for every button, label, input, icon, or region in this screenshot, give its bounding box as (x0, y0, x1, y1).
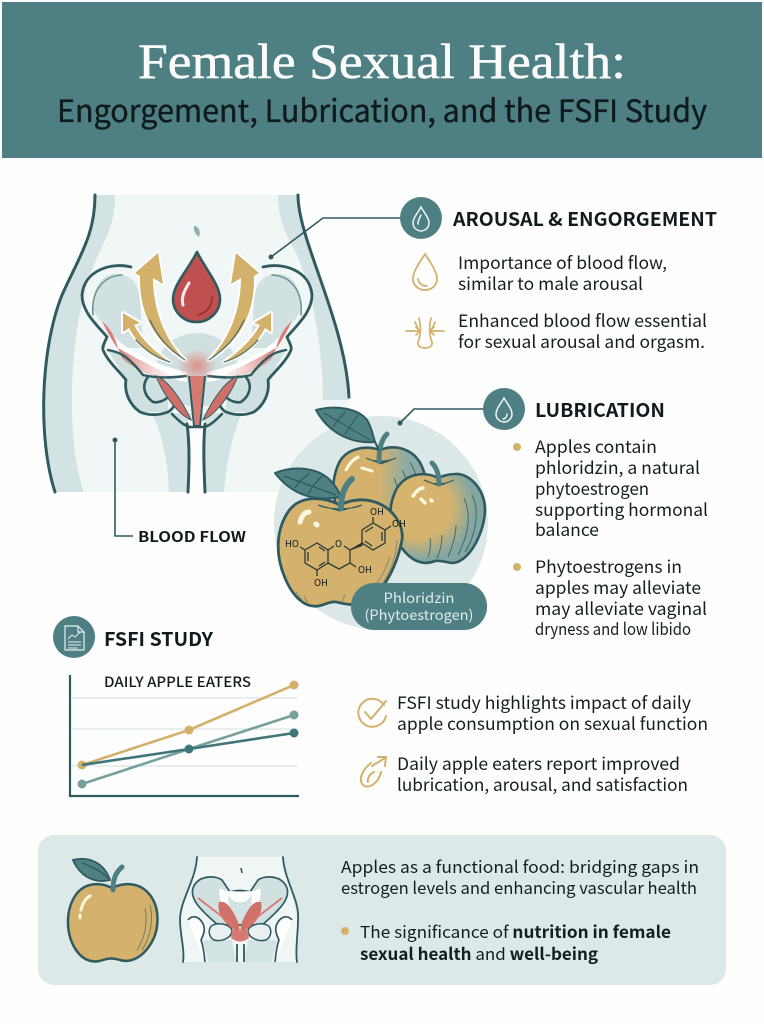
back leaf (316, 408, 379, 450)
phloridzin molecule (285, 504, 406, 589)
phloridzin label pill: (Phytoestrogen) (364, 605, 474, 625)
central muscle (177, 349, 217, 427)
FSFI text: improved outcomes: Daily apple eaters report improved (397, 750, 680, 775)
front leaf (275, 469, 341, 499)
summary bullet: significance of nutrition: The significance of nutrition in female (360, 919, 671, 943)
bullet: apples contain phloridzin: phloridzin, a natural (535, 454, 700, 479)
icon: gold drop (413, 254, 437, 290)
FSFI text: study highlights: apple consumption on sexual function (397, 710, 708, 735)
heading: arousal and engorgement: AROUSAL & ENGORGEMENT (452, 205, 717, 232)
arousal text: enhanced blood flow: Enhanced blood flow essential (458, 307, 707, 332)
icon: pelvis diagram (180, 857, 298, 962)
phloridzin molecule: HO (285, 536, 299, 550)
blood drop (173, 252, 220, 322)
line chart: daily apple eaters (70, 672, 299, 796)
bullet: apples contain phloridzin: balance (535, 516, 599, 541)
bullet: phytoestrogens in apples: may alleviate vaginal (535, 595, 707, 620)
title: Female Sexual Health: (138, 33, 626, 89)
subtitle: Engorgement, Lubrication, and the FSFI Study (57, 86, 707, 131)
front apple (278, 479, 402, 606)
series: dark teal (82, 728, 298, 765)
blood flow callout: BLOOD FLOW (138, 526, 246, 547)
arousal text: blood flow importance: similar to male arousal (458, 270, 643, 295)
phloridzin molecule: O (335, 536, 342, 550)
phloridzin label pill: Phloridzin (384, 588, 454, 608)
phloridzin molecule: OH (370, 504, 384, 518)
phloridzin molecule: OH (314, 575, 328, 589)
summary text: apples as functional food (341, 854, 699, 899)
heading: FSFI study: FSFI STUDY (104, 625, 214, 652)
series: gold (78, 680, 298, 770)
FSFI text: improved outcomes: lubrication, arousal, and satisfaction (397, 771, 688, 796)
FSFI text: improved outcomes (397, 750, 688, 796)
FSFI text: study highlights: FSFI study highlights impact of daily (397, 689, 691, 714)
apple group with phloridzin molecule (274, 408, 488, 630)
icon: FSFI study document (53, 616, 95, 658)
back apple (333, 434, 425, 512)
summary text: apples as functional food: Apples as a functional food: bridging gaps in (341, 854, 699, 878)
panel: functional food summary (38, 835, 726, 985)
icon: lubrication drop (483, 388, 525, 430)
anatomical illustration: pelvis with blood flow (44, 195, 349, 494)
central pale form (156, 333, 238, 407)
icon: apple (68, 859, 158, 961)
body silhouette (45, 195, 349, 492)
chart title: DAILY APPLE EATERS (104, 672, 251, 692)
icon: gold check circle (358, 699, 386, 727)
gold flow arrows (123, 253, 271, 362)
summary text: apples as functional food: estrogen levels and enhancing vascular health (341, 875, 697, 899)
bullet: apples contain phloridzin (513, 433, 708, 541)
summary bullet: significance of nutrition (341, 919, 671, 965)
series: light teal (78, 710, 298, 788)
navel (194, 226, 200, 237)
header banner (2, 2, 762, 158)
pale circle backdrop (274, 416, 488, 630)
right apple (390, 463, 485, 563)
heading: lubrication: LUBRICATION (535, 396, 665, 423)
phloridzin molecule: OH (392, 516, 406, 530)
blood flow callout (112, 438, 246, 547)
phloridzin molecule: OH (358, 562, 372, 576)
bullet: phytoestrogens in apples (513, 553, 707, 640)
bullet: phytoestrogens in apples: dryness and low libido (535, 616, 691, 640)
icon: arousal water drop (400, 197, 442, 239)
bullet: apples contain phloridzin: supporting hormonal (535, 496, 708, 521)
right pelvis half (203, 266, 312, 427)
icon: gold vessel with inward arrows (406, 318, 444, 348)
callout line: lubrication (400, 409, 486, 423)
arousal text: blood flow importance: Importance of blood flow, (458, 249, 667, 274)
arousal text: enhanced blood flow (458, 307, 707, 353)
bullet: phytoestrogens in apples: Phytoestrogens in (535, 553, 682, 578)
summary bullet: significance of nutrition: sexual health and well-being (360, 941, 598, 965)
arousal text: enhanced blood flow: for sexual arousal and orgasm. (458, 328, 705, 353)
left pelvis half (82, 266, 191, 427)
phloridzin label pill (351, 583, 487, 630)
bullet: phytoestrogens in apples: apples may alleviate (535, 574, 701, 599)
arousal text: blood flow importance (458, 249, 667, 295)
callout line: arousal (271, 218, 402, 257)
FSFI text: study highlights (397, 689, 708, 735)
bullet: apples contain phloridzin: Apples contain (535, 433, 657, 458)
icon: gold rising arrow (361, 757, 386, 787)
bullet: apples contain phloridzin: phytoestrogen (535, 475, 649, 500)
